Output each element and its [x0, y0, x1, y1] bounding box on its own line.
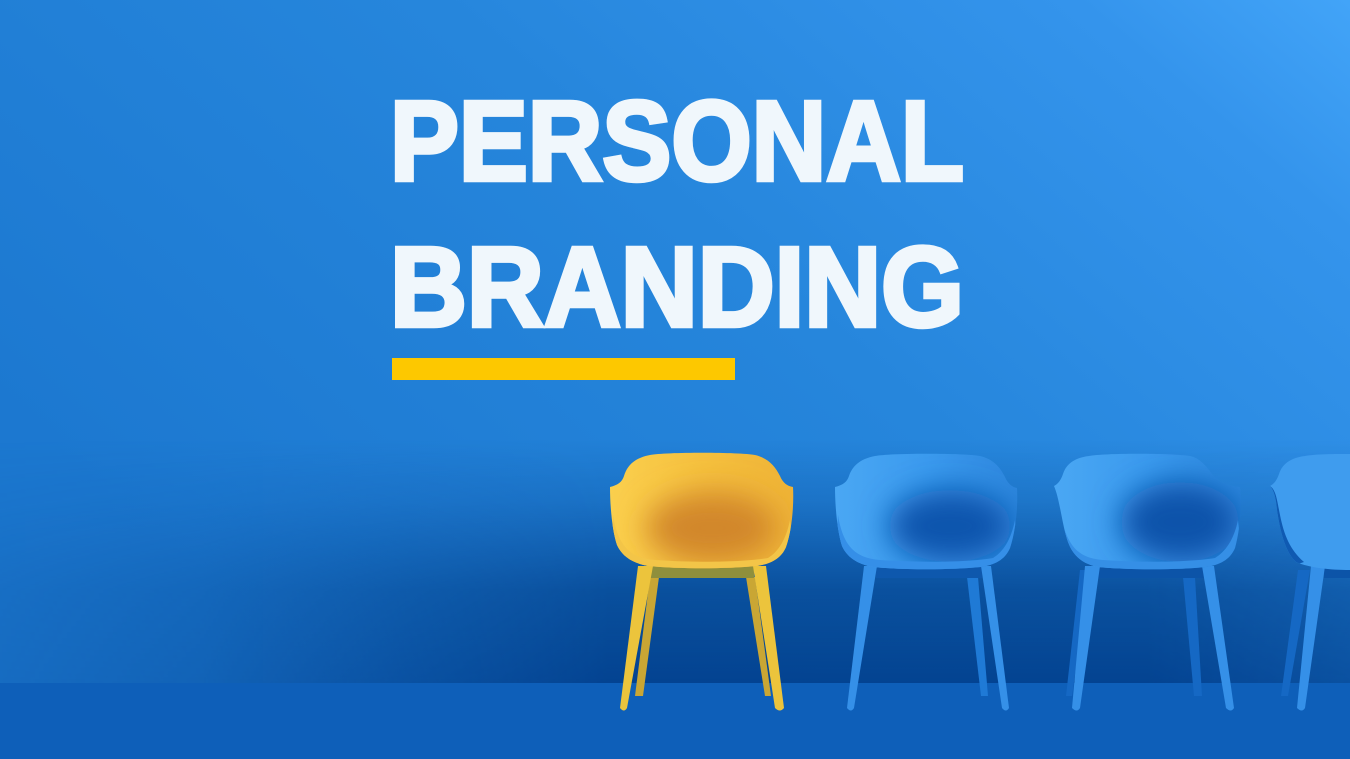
back leg: [967, 577, 988, 696]
yellow chair: [605, 450, 800, 710]
title: [390, 78, 964, 350]
front legs: [1072, 566, 1234, 710]
crossbar: [650, 566, 754, 578]
shell: [1054, 454, 1239, 570]
front legs: [620, 566, 784, 710]
back legs: [1066, 570, 1202, 696]
floor: [0, 683, 1350, 759]
title line: branding: BRANDING: [390, 224, 964, 350]
crossbar: [876, 567, 982, 578]
yellow underline: [392, 358, 735, 380]
front legs: [847, 566, 1009, 710]
back leg: [1281, 570, 1310, 696]
crossbar: [1098, 567, 1204, 578]
blue chair 3: [1050, 450, 1245, 710]
back legs: [635, 577, 771, 696]
title line: personal: PERSONAL: [390, 78, 964, 204]
blue chair 4: [1265, 450, 1350, 710]
blue chair 2: [830, 450, 1025, 710]
crossbar: [1324, 567, 1350, 578]
front leg: [1297, 566, 1325, 710]
shell: [835, 454, 1017, 570]
shell: [1270, 454, 1350, 570]
shell: [610, 452, 794, 568]
